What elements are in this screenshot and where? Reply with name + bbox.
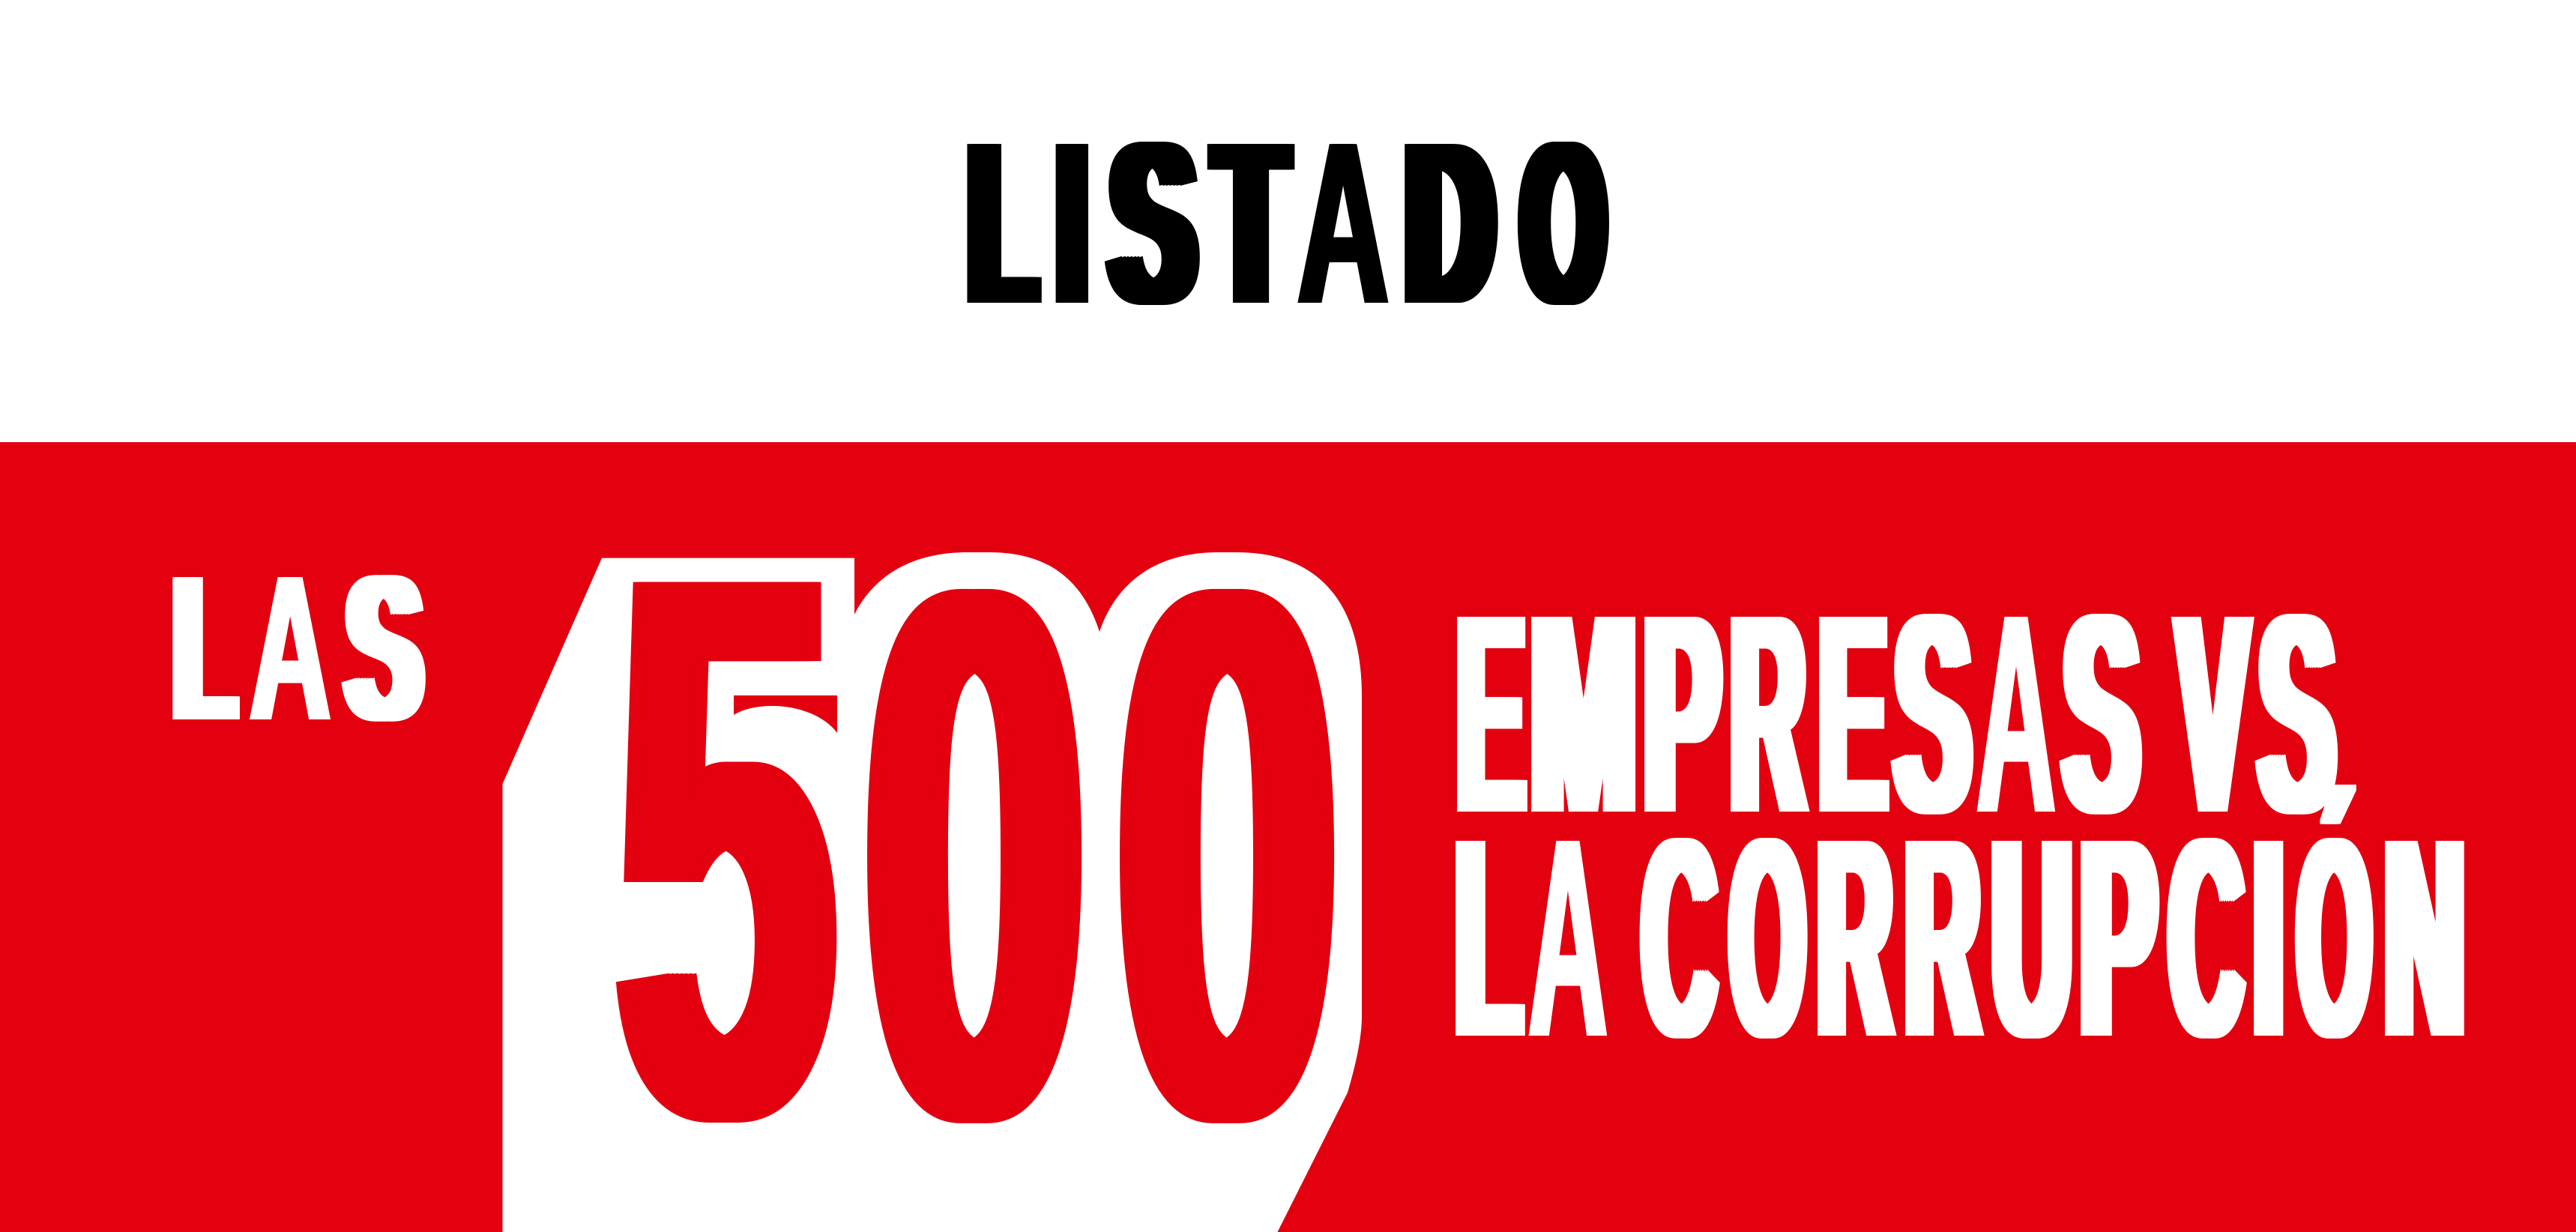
heading word: LAS: A <box>250 533 331 764</box>
heading line: EMPRESAS VS: P <box>1644 556 1720 872</box>
heading line: EMPRESAS VS: M <box>1531 556 1635 872</box>
heading line: EMPRESAS VS: V <box>2177 556 2248 872</box>
heading word: LAS: L <box>174 533 235 764</box>
heading line: EMPRESAS VS: E <box>1818 556 1886 872</box>
heading line: LA CORRUPCIÓN <box>1456 780 2464 1096</box>
heading line: EMPRESAS VS: R <box>1731 556 1806 872</box>
heading word: LAS: S <box>347 533 421 764</box>
heading line: LA CORRUPCIÓN: C <box>2169 780 2243 1096</box>
heading line: LA CORRUPCIÓN: L <box>1456 780 1521 1096</box>
title: LISTADO: L <box>968 94 1035 352</box>
heading line: LA CORRUPCIÓN: C <box>1642 780 1716 1096</box>
heading line: EMPRESAS VS: S <box>2259 556 2335 872</box>
heading word: LAS <box>172 533 426 764</box>
heading line: EMPRESAS VS: A <box>1976 556 2056 872</box>
title: LISTADO: A <box>1297 94 1389 352</box>
heading line: LA CORRUPCIÓN: U <box>1992 780 2072 1096</box>
heading line: LA CORRUPCIÓN: I <box>2254 780 2283 1096</box>
title: LISTADO: O <box>1522 94 1605 352</box>
title: LISTADO: I <box>1058 94 1087 352</box>
heading line: LA CORRUPCIÓN: R <box>1905 780 1980 1096</box>
title: LISTADO: D <box>1407 94 1493 352</box>
title: LISTADO: T <box>1216 94 1286 352</box>
heading line: EMPRESAS VS: E <box>1457 556 1524 872</box>
heading line: LA CORRUPCIÓN: P <box>2081 780 2156 1096</box>
big number: 500 <box>616 414 1337 1232</box>
heading line: LA CORRUPCIÓN: O <box>1730 780 1805 1096</box>
heading line: LA CORRUPCIÓN: Ó <box>2297 780 2371 1096</box>
heading line: LA CORRUPCIÓN: N <box>2385 780 2464 1096</box>
heading line: LA CORRUPCIÓN: R <box>1818 780 1892 1096</box>
heading line: EMPRESAS VS: S <box>2063 556 2139 872</box>
panel: red band <box>0 442 2576 1232</box>
heading line: EMPRESAS VS <box>1457 556 2431 1039</box>
title: LISTADO: S <box>1111 94 1195 352</box>
heading line: EMPRESAS VS: S <box>1895 556 1970 872</box>
heading line: LA CORRUPCIÓN: A <box>1528 780 1608 1096</box>
title: LISTADO <box>967 94 1609 352</box>
